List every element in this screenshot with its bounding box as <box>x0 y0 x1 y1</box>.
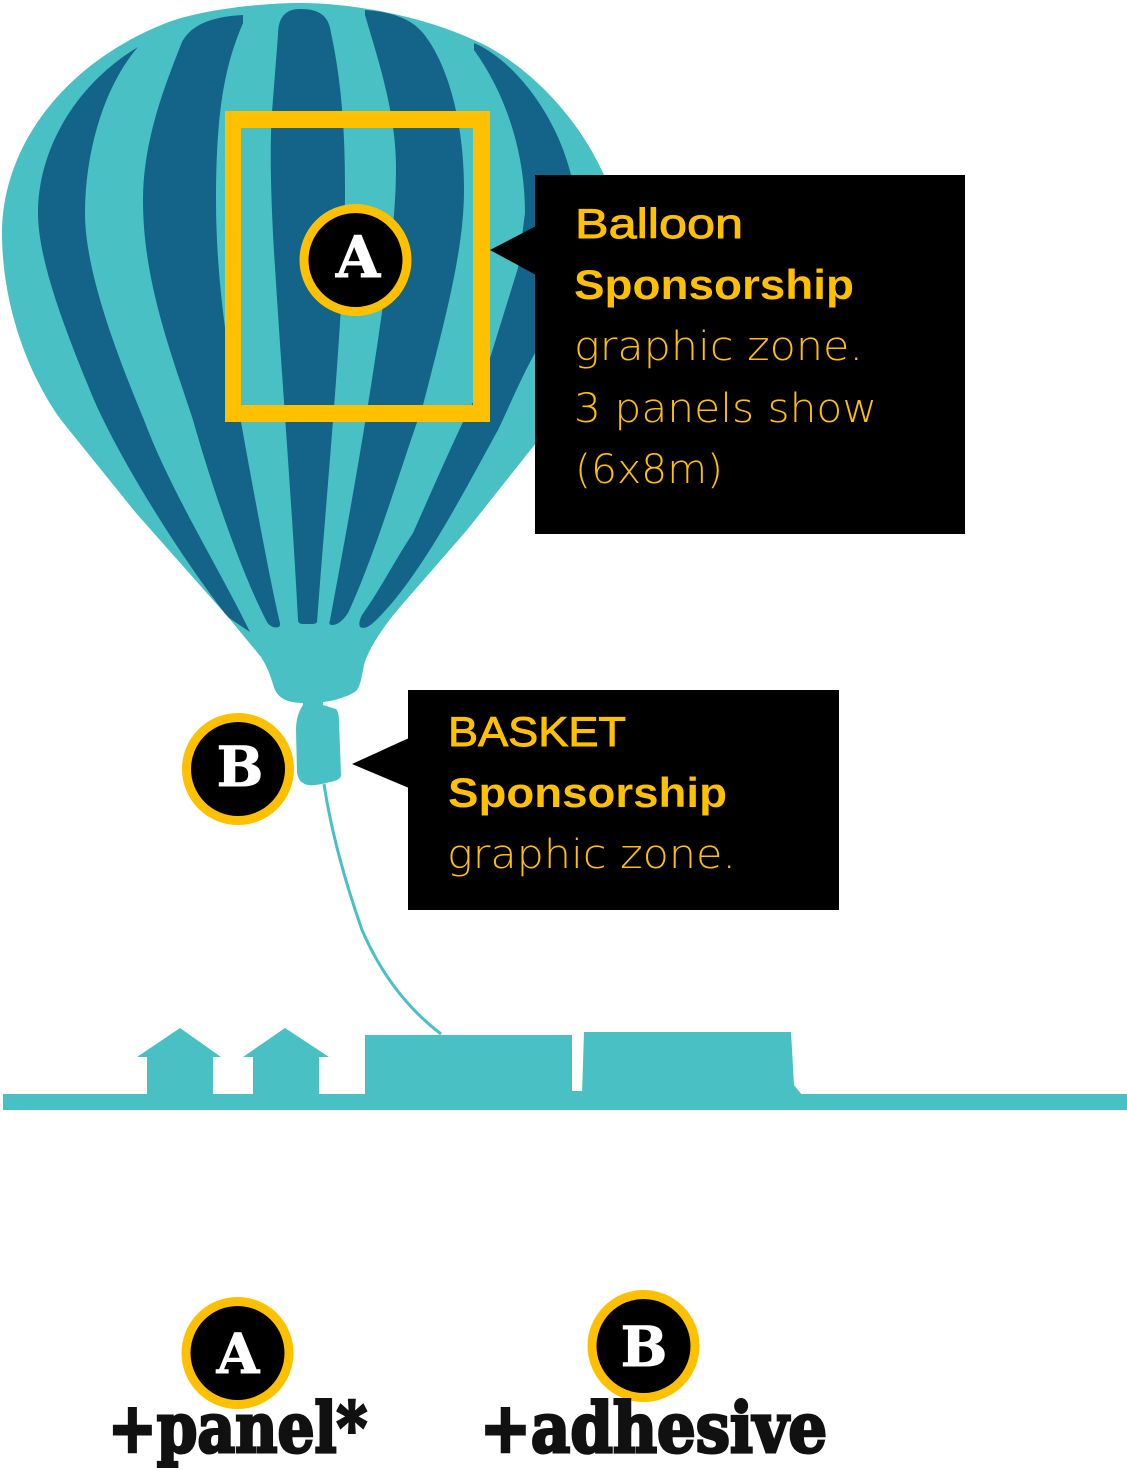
ground strip <box>3 1094 1127 1110</box>
illustration: hot air balloon <box>2 3 611 1034</box>
callout text: (6x8m) <box>575 447 723 493</box>
legend: panel <box>108 1302 367 1469</box>
badge A <box>186 1302 289 1404</box>
warehouse right <box>582 1032 802 1095</box>
callout text: graphic zone. <box>447 832 736 878</box>
balloon dark stripes <box>38 9 573 632</box>
badge B: B <box>621 1314 667 1379</box>
legend: adhesive <box>480 1294 827 1469</box>
callout text <box>574 200 877 493</box>
badge A on balloon: A <box>335 224 381 291</box>
callout text: BASKET <box>448 708 626 755</box>
label +adhesive: +adhesive <box>480 1388 827 1469</box>
badge B at basket: B <box>217 734 263 799</box>
warehouse left <box>365 1035 586 1095</box>
callout pointer <box>352 738 409 788</box>
basket <box>296 700 341 785</box>
callout text: 3 panels show <box>574 386 877 432</box>
balloon envelope <box>2 3 611 703</box>
callout box <box>408 690 839 910</box>
badge B <box>592 1294 695 1398</box>
badge B at basket <box>186 718 290 820</box>
house left <box>137 1028 221 1095</box>
sponsorship zone frame A <box>225 111 490 422</box>
callout text: Sponsorship <box>574 261 854 308</box>
callout: balloon sponsorship <box>490 175 965 534</box>
callout: basket sponsorship <box>352 690 839 910</box>
ground with buildings <box>3 1028 1127 1110</box>
label +panel*: +panel* <box>108 1388 367 1469</box>
callout pointer <box>490 226 536 275</box>
callout text: graphic zone. <box>574 324 863 370</box>
callout text: Balloon <box>575 200 743 247</box>
house right <box>243 1028 329 1095</box>
callout box <box>535 175 965 534</box>
callout text: Sponsorship <box>448 769 727 816</box>
badge A: A <box>216 1321 261 1386</box>
tether rope <box>324 784 441 1034</box>
callout text <box>447 708 736 878</box>
badge A on balloon <box>304 208 407 312</box>
